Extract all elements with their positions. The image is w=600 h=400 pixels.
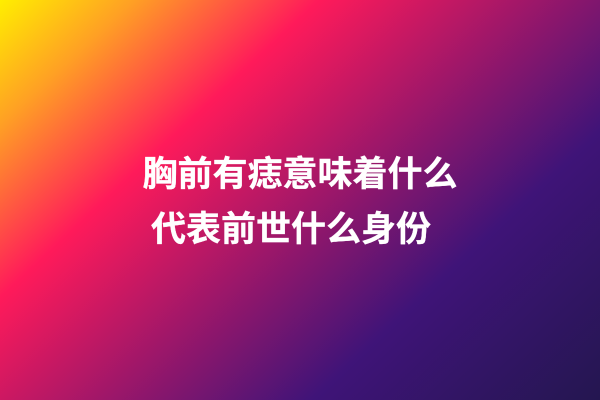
title line 1: 胸前有痣意味着什么 <box>142 155 458 194</box>
title line 2: 代表前世什么身份 <box>151 210 431 249</box>
